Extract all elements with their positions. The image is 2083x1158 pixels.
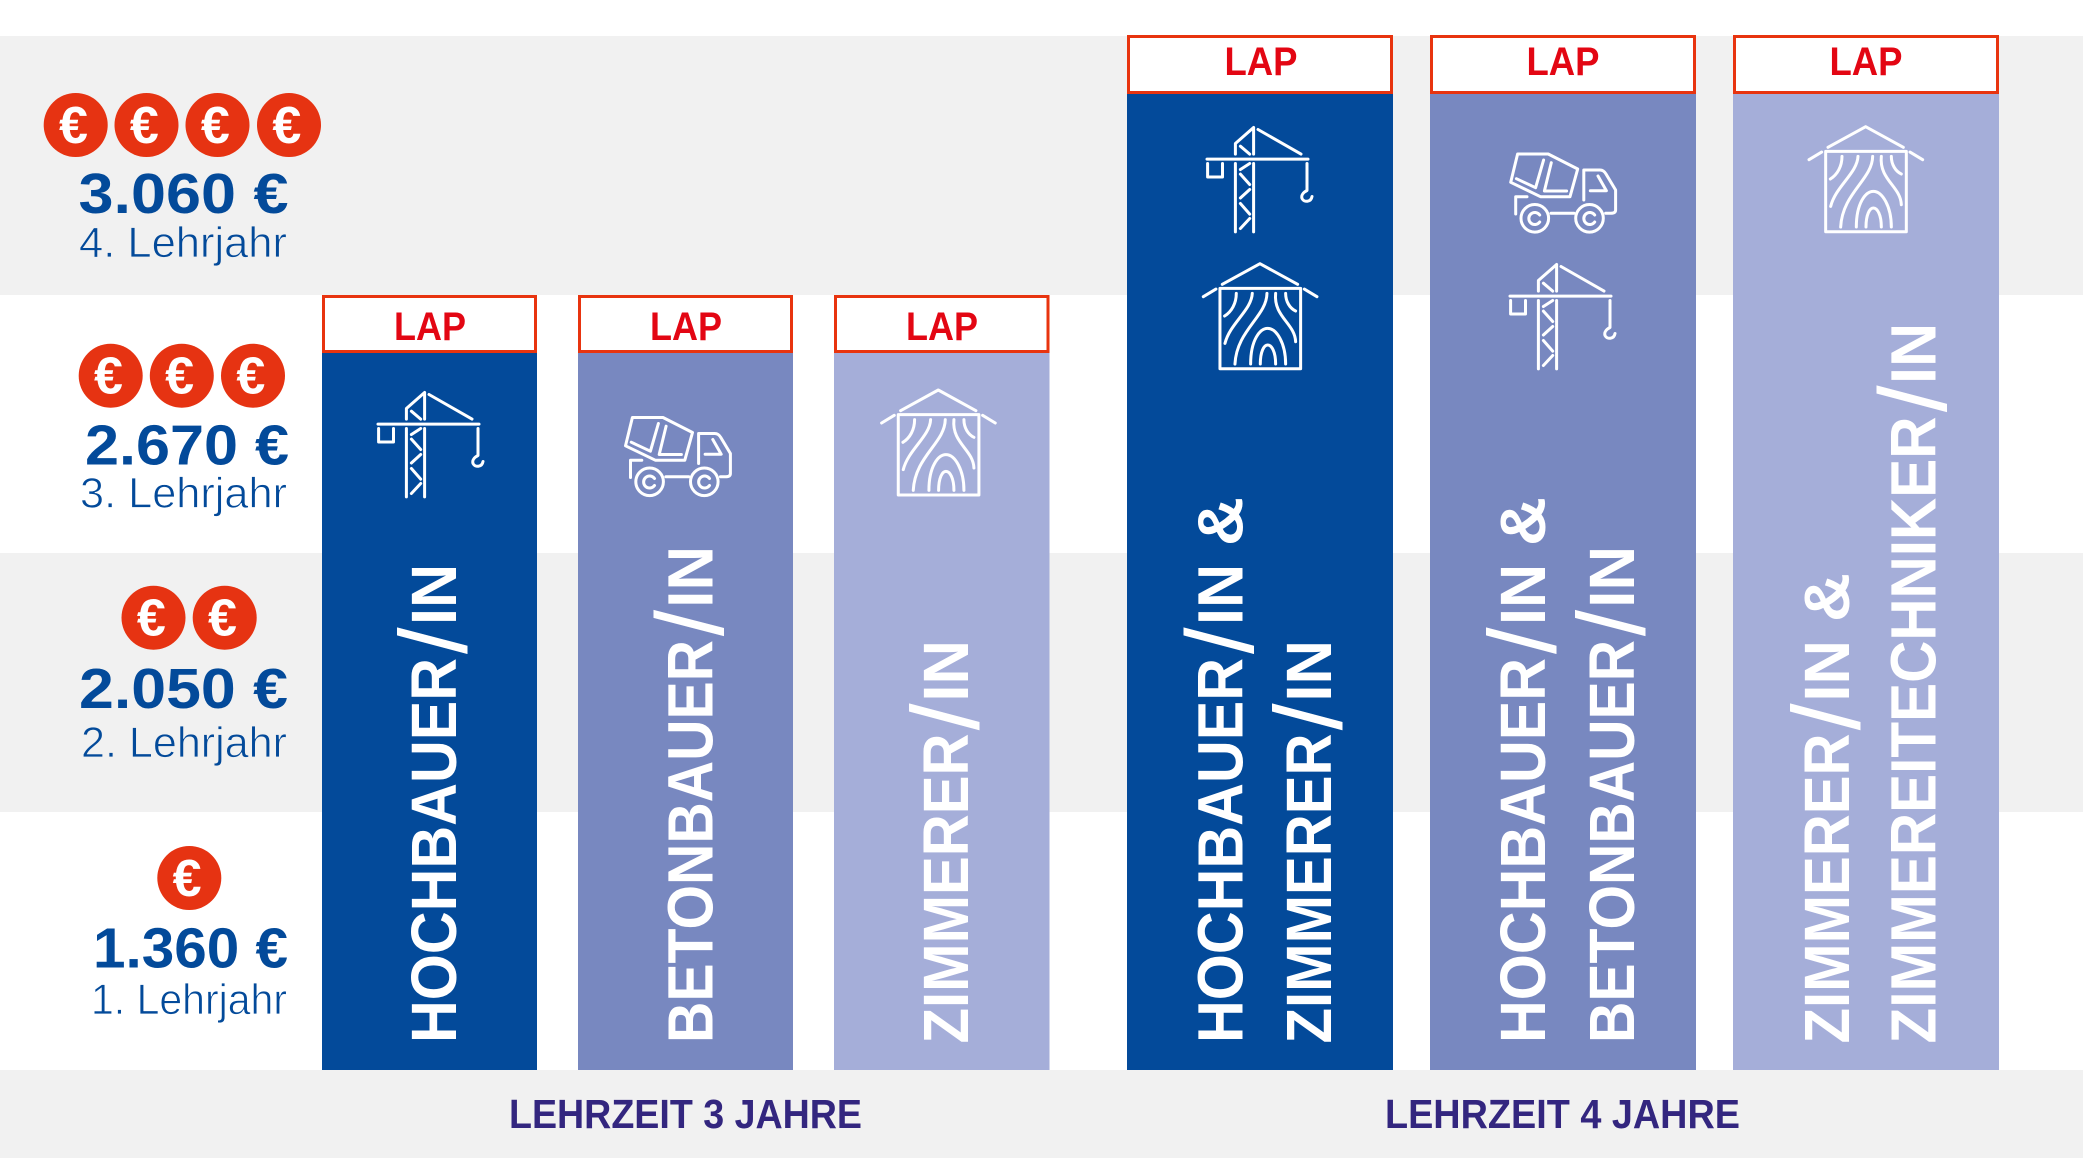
vertical label line 1	[1168, 497, 1274, 1043]
vertical label	[381, 564, 487, 1043]
LAP box	[836, 296, 1048, 352]
bar	[834, 353, 1050, 1070]
panel: Betonbauer/in	[578, 296, 793, 1070]
vertical label: IN	[398, 564, 470, 625]
panel: Hochbauer/in & Betonbauer/in	[1430, 36, 1696, 1070]
icon: crane	[1207, 128, 1312, 232]
vertical label line 1: /	[1774, 703, 1880, 730]
bar	[1430, 94, 1696, 1070]
vertical label line 1: HOCHBAUER	[1184, 658, 1256, 1043]
vertical label line 2	[1559, 546, 1665, 1043]
bar	[322, 353, 537, 1070]
bar	[1733, 94, 1999, 1070]
salary block: 2. Lehrjahr	[79, 586, 288, 767]
vertical label line 1: /	[1470, 627, 1576, 653]
vertical label line 2: /	[1861, 385, 1967, 412]
icon: three euro coins: €	[94, 348, 123, 406]
icon: four euro coins: €	[201, 97, 230, 155]
vertical label line 1	[1470, 497, 1576, 1043]
vertical label	[638, 546, 744, 1043]
label: 2. Lehrjahr: 2. Lehrjahr	[81, 719, 287, 767]
icon: three euro coins	[79, 344, 285, 408]
icon: concrete mixer truck	[626, 418, 730, 496]
vertical label: HOCHBAUER	[398, 658, 470, 1043]
icon: four euro coins: €	[59, 97, 88, 155]
icon: crane	[1510, 264, 1615, 369]
vertical label line 2	[1861, 323, 1967, 1044]
icon: four euro coins: €	[130, 97, 159, 155]
LAP box: LAP	[394, 305, 466, 349]
vertical label line 2: BETONBAUER	[1576, 640, 1648, 1043]
vertical label line 2: /	[1256, 703, 1362, 730]
LAP box	[580, 296, 792, 352]
vertical label line 1: HOCHBAUER	[1487, 658, 1559, 1043]
icon: two euro coins: €	[137, 590, 166, 648]
amount: 1.360 €: 1.360 €	[93, 916, 288, 980]
vertical label line 2: IN	[1273, 640, 1345, 702]
salary block: 1. Lehrjahr	[91, 846, 288, 1024]
vertical label: ZIMMERER	[910, 734, 982, 1044]
vertical label line 2: ZIMMEREITECHNIKER	[1878, 416, 1950, 1044]
vertical label line 1: &	[1184, 497, 1256, 546]
vertical label: /	[893, 703, 999, 730]
amount: 2.050 €: 2.050 €	[79, 657, 288, 721]
footer label: Lehrzeit 4 Jahre: LEHRZEIT 4 JAHRE	[1385, 1091, 1740, 1137]
footer band	[0, 1070, 2083, 1158]
salary block: 3. Lehrjahr	[79, 344, 289, 518]
LAP box	[1734, 36, 1998, 92]
icon: concrete mixer truck	[1511, 154, 1616, 232]
vertical label: /	[638, 610, 744, 636]
vertical label line 2: /	[1559, 610, 1665, 636]
vertical label line 2: IN	[1576, 546, 1648, 608]
vertical label line 2: IN	[1878, 323, 1950, 384]
vertical label line 2: ZIMMERER	[1273, 734, 1345, 1044]
icon: timber house	[1203, 264, 1317, 369]
icon: four euro coins	[44, 93, 321, 157]
label: 3. Lehrjahr: 3. Lehrjahr	[80, 470, 287, 518]
LAP box	[1128, 36, 1392, 92]
icon: one euro coin	[157, 846, 221, 910]
label: 1. Lehrjahr: 1. Lehrjahr	[91, 976, 287, 1024]
vertical label line 1: &	[1791, 573, 1863, 622]
panel: Hochbauer/in	[322, 296, 537, 1070]
vertical label: IN	[655, 546, 727, 608]
panel: Zimmerer/in	[834, 296, 1050, 1070]
footer label: Lehrzeit 3 Jahre: LEHRZEIT 3 JAHRE	[509, 1091, 862, 1137]
vertical label	[893, 640, 999, 1044]
panel: Hochbauer/in & Zimmerer/in	[1127, 36, 1393, 1070]
vertical label: BETONBAUER	[655, 640, 727, 1043]
LAP box: LAP	[1224, 40, 1298, 84]
background row: 2. Lehrjahr	[0, 553, 2083, 812]
icon: two euro coins: €	[208, 590, 237, 648]
vertical label line 1: /	[1168, 627, 1274, 653]
bar	[1127, 94, 1393, 1070]
icon: one euro coin: €	[173, 850, 202, 908]
vertical label line 1: ZIMMERER	[1791, 734, 1863, 1044]
icon: four euro coins: €	[272, 97, 301, 155]
LAP box: LAP	[1830, 40, 1902, 84]
vertical label: IN	[910, 640, 982, 702]
LAP box: LAP	[1526, 40, 1600, 84]
vertical label line 1: &	[1487, 497, 1559, 546]
LAP box: LAP	[906, 305, 978, 349]
amount: 2.670 €: 2.670 €	[85, 414, 289, 478]
icon: three euro coins: €	[236, 348, 265, 406]
vertical label line 2	[1256, 640, 1362, 1044]
amount: 3.060 €: 3.060 €	[78, 162, 288, 226]
LAP box: LAP	[650, 305, 722, 349]
vertical label: /	[381, 627, 487, 653]
icon: timber house	[882, 390, 995, 495]
background row: 4. Lehrjahr	[0, 36, 2083, 295]
LAP box	[324, 296, 536, 352]
vertical label line 1	[1774, 573, 1880, 1044]
bar	[578, 353, 793, 1070]
icon: two euro coins	[122, 586, 257, 650]
vertical label line 1: IN	[1487, 564, 1559, 625]
panel: Zimmerer/in & Zimmereitechniker/in	[1733, 36, 1999, 1070]
icon: timber house	[1809, 127, 1923, 232]
vertical label line 1: IN	[1184, 564, 1256, 625]
label: 4. Lehrjahr: 4. Lehrjahr	[79, 219, 287, 267]
LAP box	[1432, 36, 1694, 92]
salary block: 4. Lehrjahr	[44, 93, 321, 267]
vertical label line 1: IN	[1791, 640, 1863, 702]
icon: crane	[378, 392, 483, 497]
icon: three euro coins: €	[165, 348, 194, 406]
